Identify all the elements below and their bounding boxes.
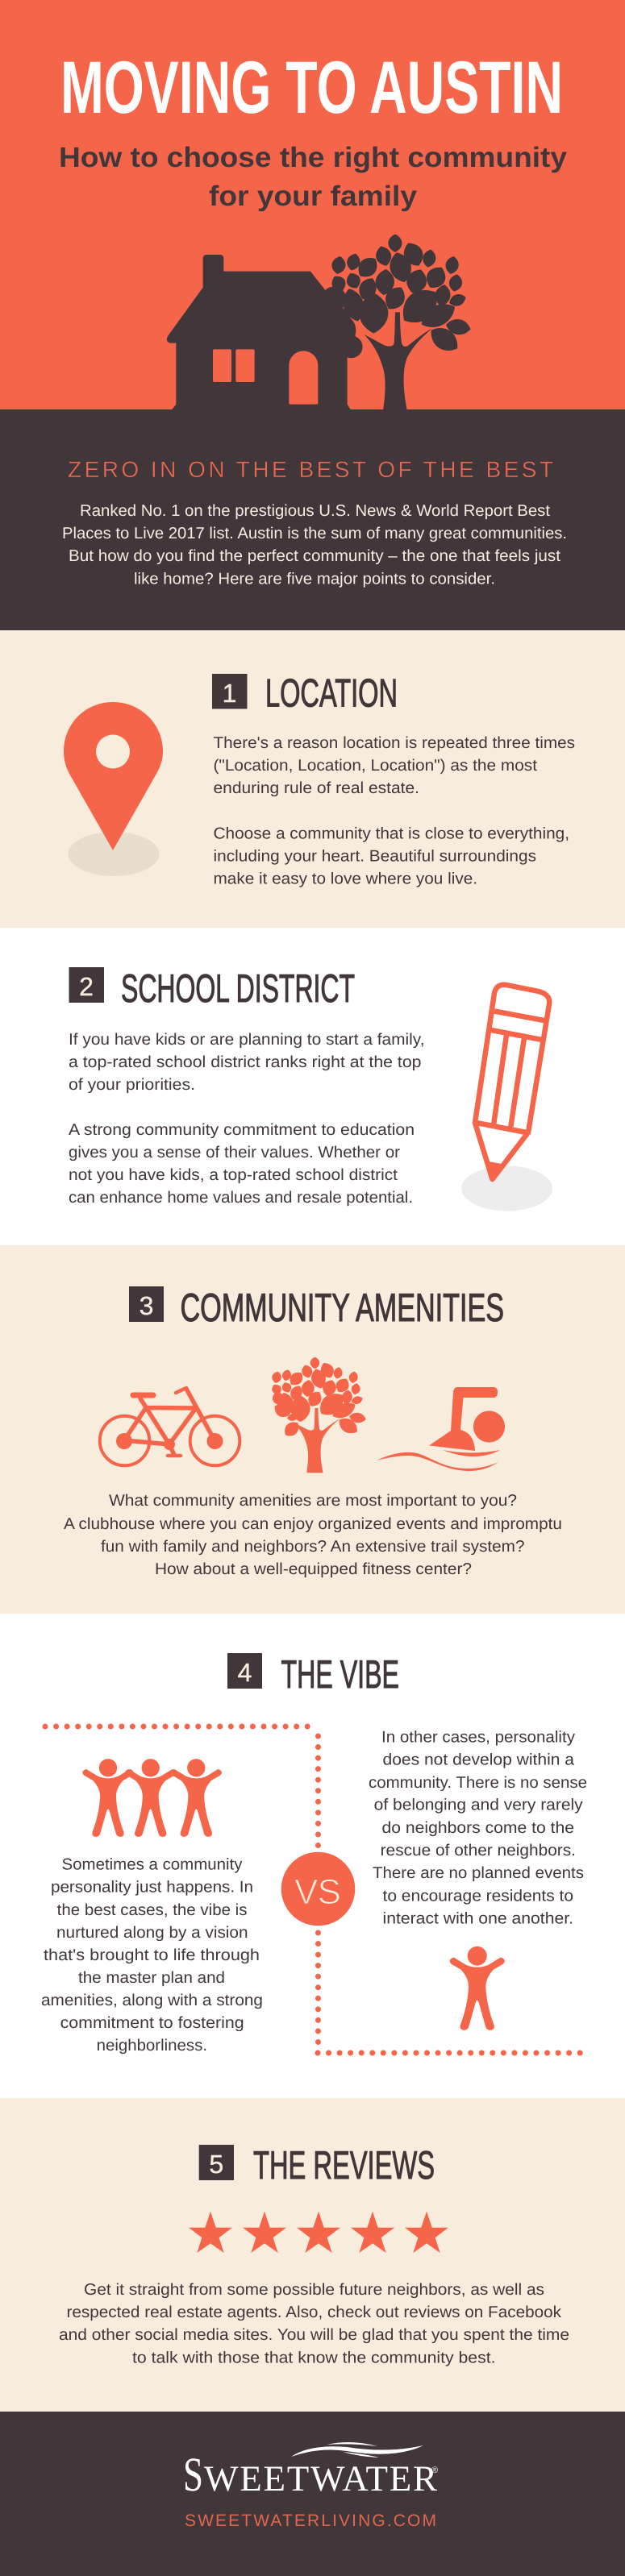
- number badge 3: [129, 1286, 164, 1322]
- website url: SWEETWATERLIVING.COM: [185, 2512, 436, 2530]
- intro text: Ranked No. 1 on the prestigious U.S. News & World Report Best: [80, 502, 550, 520]
- left vibe text: nurtured along by a vision: [56, 1924, 248, 1942]
- subtitle: for your family: [209, 181, 418, 212]
- right vibe text: interact with one another.: [382, 1910, 573, 1928]
- intro heading: ZERO IN ON THE BEST OF THE BEST: [68, 457, 553, 482]
- location text: [213, 734, 575, 888]
- panel: footer: [0, 2412, 625, 2576]
- right vibe text: community. There is no sense: [369, 1774, 587, 1792]
- amenities text: How about a well-equipped fitness center?: [155, 1560, 472, 1578]
- vs badge: [281, 1852, 355, 1926]
- icon: tree: [270, 1357, 367, 1473]
- left vibe text: amenities, along with a strong: [41, 1992, 263, 2009]
- location text: enduring rule of real estate.: [213, 779, 419, 797]
- logo: sweetwater: S: [183, 2448, 203, 2501]
- number badge 1: [212, 674, 247, 709]
- reviews text: to talk with those that know the community best.: [132, 2349, 495, 2366]
- right vibe text: to encourage residents to: [382, 1888, 573, 1905]
- location text: There's a reason location is repeated three times: [213, 734, 575, 752]
- panel: location: [0, 630, 625, 928]
- right vibe text: of belonging and very rarely: [374, 1797, 583, 1814]
- number badge 4: [227, 1653, 262, 1689]
- vs badge: VS: [294, 1872, 341, 1912]
- icon: pencil: [461, 985, 552, 1211]
- intro text: Places to Live 2017 list. Austin is the sum of many great communities.: [62, 525, 567, 542]
- school text: of your priorities.: [69, 1076, 195, 1094]
- intro text: [62, 502, 567, 588]
- number badge 2: [69, 967, 104, 1003]
- location text: Choose a community that is close to everything,: [213, 825, 569, 843]
- left vibe text: personality just happens. In: [51, 1878, 253, 1896]
- heading: the reviews: THE REVIEWS: [253, 2144, 435, 2188]
- left vibe text: [41, 1855, 263, 2055]
- reviews text: and other social media sites. You will be glad that you spent the time: [59, 2326, 569, 2344]
- icon: bicycle: [100, 1388, 240, 1465]
- school text: gives you a sense of their values. Whether or: [69, 1144, 400, 1161]
- logo: sweetwater: [183, 2442, 438, 2501]
- number badge 5: [199, 2145, 234, 2180]
- heading: location: LOCATION: [265, 672, 398, 716]
- school text: a top-rated school district ranks right at the top: [69, 1053, 421, 1071]
- location text: make it easy to love where you live.: [213, 870, 477, 888]
- panel: header: [0, 0, 625, 411]
- number badge 1: 1: [223, 679, 236, 708]
- panel: the reviews: [0, 2098, 625, 2412]
- number badge 4: 4: [238, 1658, 252, 1687]
- left vibe text: Sometimes a community: [61, 1855, 242, 1873]
- icon: house silhouette: [167, 255, 363, 411]
- panel: school district: [0, 928, 625, 1245]
- panel: the vibe: [0, 1614, 625, 2098]
- reviews text: respected real estate agents. Also, check out reviews on Facebook: [66, 2304, 562, 2321]
- right vibe text: does not develop within a: [382, 1751, 575, 1768]
- left vibe text: commitment to fostering: [60, 2014, 244, 2032]
- number badge 2: 2: [79, 972, 94, 1001]
- panel: community amenities: [0, 1245, 625, 1614]
- school text: A strong community commitment to education: [69, 1121, 415, 1139]
- left vibe text: neighborliness.: [97, 2037, 207, 2055]
- school text: can enhance home values and resale potential.: [69, 1189, 413, 1207]
- number badge 5: 5: [209, 2150, 223, 2179]
- school text: If you have kids or are planning to start a family,: [69, 1031, 424, 1049]
- location text: ("Location, Location, Location") as the most: [213, 757, 537, 775]
- logo: sweetwater: WEETWATER: [204, 2458, 437, 2499]
- amenities text: fun with family and neighbors? An extensive trail system?: [101, 1538, 524, 1556]
- reviews text: Get it straight from some possible future neighbors, as well as: [84, 2281, 544, 2299]
- subtitle: How to choose the right community: [59, 142, 568, 173]
- school text: not you have kids, a top-rated school district: [69, 1166, 398, 1184]
- reviews text: [59, 2281, 569, 2366]
- amenities text: [64, 1492, 562, 1578]
- amenities text: A clubhouse where you can enjoy organized events and impromptu: [64, 1515, 562, 1533]
- left vibe text: the best cases, the vibe is: [57, 1901, 247, 1919]
- icon: map pin: [64, 702, 163, 876]
- five stars: [189, 2212, 448, 2253]
- heading: school district: SCHOOL DISTRICT: [121, 967, 355, 1011]
- panel: intro: [0, 409, 625, 630]
- icon: three linked people: [82, 1759, 222, 1837]
- subtitle: [59, 142, 568, 212]
- heading: the vibe: THE VIBE: [281, 1653, 399, 1697]
- school text: [69, 1031, 424, 1207]
- icon: tree behind house: [329, 235, 472, 411]
- right vibe text: There are no planned events: [373, 1864, 584, 1882]
- location text: including your heart. Beautiful surroundings: [213, 848, 536, 866]
- logo: sweetwater: ®: [431, 2466, 438, 2475]
- number badge 3: 3: [140, 1291, 153, 1320]
- icon: swimmer: [377, 1387, 505, 1471]
- amenities text: What community amenities are most important to you?: [109, 1492, 517, 1510]
- left vibe text: that's brought to life through: [44, 1947, 260, 1964]
- intro text: like home? Here are five major points to consider.: [134, 571, 495, 588]
- right vibe text: do neighbors come to the: [382, 1819, 574, 1837]
- dotted divider: [45, 1726, 590, 2053]
- right vibe text: rescue of other neighbors.: [381, 1842, 576, 1859]
- right vibe text: In other cases, personality: [381, 1728, 575, 1746]
- right vibe text: [369, 1728, 587, 1928]
- left vibe text: the master plan and: [78, 1969, 225, 1987]
- intro text: But how do you find the perfect community – the one that feels just: [69, 547, 560, 565]
- icon: single person: [450, 1947, 505, 2030]
